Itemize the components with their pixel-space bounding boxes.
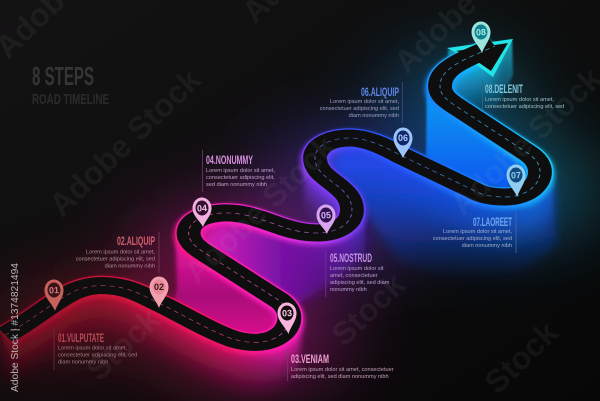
watermarks: Stock xyxy=(477,314,565,401)
body 03: Lorem ipsum dolor sit amet, consectetuer xyxy=(291,367,394,373)
step 03 label xyxy=(287,351,394,381)
step 04 label xyxy=(202,150,275,192)
arrow neon outline xyxy=(447,39,513,77)
heading 02: 02.ALIQUIP xyxy=(117,234,155,248)
body 02: diam nonummy nibh xyxy=(105,264,155,270)
body 04: consectetuer adipiscing elit, xyxy=(206,175,275,181)
body 04: sed diam nonummy nibh xyxy=(206,182,267,188)
step 05 label xyxy=(325,250,390,297)
pin 04: 04 xyxy=(197,203,207,213)
step 01 label xyxy=(54,328,137,370)
heading 08: 08.DELENIT xyxy=(485,82,523,96)
body 05: nonummy nibh xyxy=(330,287,367,293)
pin 04 xyxy=(192,197,212,227)
body 01: Lorem ipsum dolor sit amet, xyxy=(58,346,127,352)
pin 06: 06 xyxy=(398,133,408,143)
step 02 label xyxy=(76,232,159,273)
pin 05: 05 xyxy=(321,210,331,220)
heading 03: 03.VENIAM xyxy=(291,352,329,366)
road surface xyxy=(5,46,540,342)
watermarks: Stock xyxy=(79,301,167,388)
road neon edge xyxy=(5,46,540,344)
arrow head xyxy=(447,39,513,77)
body 05: adipiscing elit, sed diam xyxy=(330,280,390,286)
arrow black fill xyxy=(456,43,508,71)
body 06: consectetuer adipiscing elit, sed xyxy=(320,106,399,112)
background colour glow xyxy=(5,66,540,362)
pin 08: 08 xyxy=(476,27,486,37)
body 02: consectetuer adipiscing elit, sed xyxy=(76,256,155,262)
azure wall xyxy=(426,85,528,188)
title xyxy=(32,61,109,108)
road centre dashes xyxy=(5,46,540,342)
body 08: Lorem ipsum dolor sit amet, xyxy=(485,97,554,103)
title line 1: 8 STEPS xyxy=(32,61,94,91)
body 06: Lorem ipsum dolor sit amet, xyxy=(330,99,399,105)
pin 03 xyxy=(277,302,298,335)
step 07 label xyxy=(433,212,516,253)
body 05: Lorem ipsum dolor sit xyxy=(330,266,384,272)
body 08: consectetuer adipiscing elit, sed xyxy=(485,104,564,110)
arrow wall xyxy=(448,40,513,112)
watermarks: Stock xyxy=(324,266,412,353)
purple inner wall xyxy=(203,215,368,305)
pin 05 xyxy=(316,204,336,234)
title line 2: ROAD TIMELINE xyxy=(32,92,109,108)
step 08 label xyxy=(482,80,564,110)
body 07: consectetuer adipiscing elit, sed xyxy=(433,236,512,242)
step 06 label xyxy=(320,82,403,123)
road extruded walls xyxy=(5,51,540,388)
vertical stock id: Adobe Stock | #1374821494 xyxy=(10,263,21,392)
body 07: diam nonummy nibh xyxy=(462,243,512,249)
body 07: Lorem ipsum dolor sit amet, xyxy=(443,229,512,235)
body 01: diam nonummy nibh xyxy=(58,360,108,366)
pin 03: 03 xyxy=(282,308,292,319)
body 01: consectetuer adipiscing elit, sed xyxy=(58,352,137,358)
pink wall xyxy=(170,238,292,342)
body 05: amet, consectetuer xyxy=(330,273,378,279)
body 04: Lorem ipsum dolor sit amet, xyxy=(206,168,275,174)
heading 04: 04.NONUMMY xyxy=(206,153,253,167)
blue lower wall xyxy=(328,148,556,280)
pin 01: 01 xyxy=(49,285,59,295)
body 02: Lorem ipsum dolor sit amet, xyxy=(86,250,155,256)
heading 01: 01.VULPUTATE xyxy=(58,331,104,345)
body 03: adipiscing elit, sed diam nonummy nibh xyxy=(291,374,389,380)
heading 05: 05.NOSTRUD xyxy=(330,251,372,265)
heading 07: 07.LAOREET xyxy=(473,215,512,229)
pin 02 xyxy=(150,276,168,308)
pin 07: 07 xyxy=(511,170,521,180)
pin 01 xyxy=(44,279,65,311)
body 06: diam nonummy nibh xyxy=(349,113,399,119)
pin 08 xyxy=(471,21,492,53)
pin 06 xyxy=(394,128,412,158)
pin 02: 02 xyxy=(154,282,164,292)
watermarks: Adobe Stock xyxy=(177,128,343,290)
pin 07 xyxy=(506,164,527,197)
road glow xyxy=(5,48,540,344)
watermarks: Adobe Stock xyxy=(42,61,208,223)
heading 06: 06.ALIQUIP xyxy=(361,85,399,99)
